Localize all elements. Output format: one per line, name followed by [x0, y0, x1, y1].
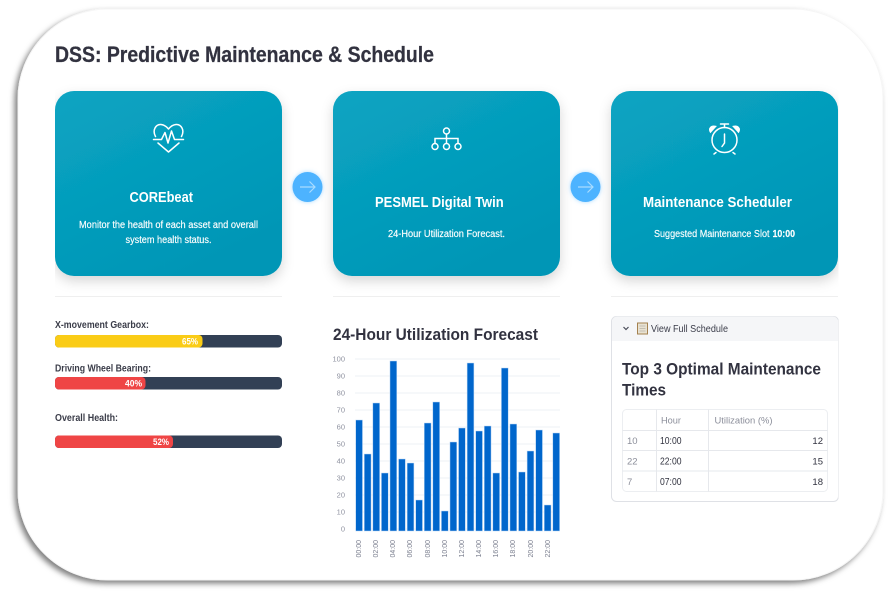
table: optimal maintenance times: [622, 410, 828, 492]
x axis labels: 08:00: [425, 540, 432, 558]
bars: [356, 361, 560, 531]
table: optimal maintenance times: 10: [627, 436, 638, 447]
heading: top 3 times: Times: [622, 380, 666, 400]
card description: 10:00: [772, 229, 795, 240]
icon: chevron: [624, 327, 628, 330]
x axis labels: 10:00: [442, 540, 449, 558]
bar: Driving Wheel Bearing: [55, 364, 282, 390]
arrow: COREbeat to Digital Twin: [292, 172, 322, 202]
card description: Monitor the health of each asset and overall: [79, 220, 258, 231]
table: optimal maintenance times: 07:00: [660, 476, 682, 488]
y axis labels: 80: [337, 388, 345, 398]
y axis labels: 50: [337, 440, 345, 448]
card description: [79, 220, 258, 246]
x axis labels: 14:00: [476, 540, 483, 558]
table: optimal maintenance times: 12: [812, 436, 823, 447]
table: optimal maintenance times: Hour: [661, 416, 681, 426]
icon: alarm clock: [710, 124, 739, 154]
bar chart: 24-hour utilization: [332, 354, 560, 558]
icon: network hierarchy: [432, 128, 461, 150]
panel: health status bars: [55, 320, 282, 448]
table: optimal maintenance times: 22:00: [660, 456, 682, 468]
table: optimal maintenance times: 18: [812, 477, 823, 488]
y axis labels: 10: [337, 508, 345, 516]
y axis labels: 30: [337, 474, 345, 482]
y axis labels: 100: [332, 354, 345, 364]
table: optimal maintenance times: 7: [627, 477, 632, 488]
dashboard content: [55, 42, 838, 558]
panel: PESMEL Digital Twin card: [333, 91, 560, 276]
card heading: PESMEL Digital Twin: PESMEL Digital Twin: [375, 195, 504, 211]
panel: Maintenance Scheduler card: [611, 91, 838, 276]
card description: 24-Hour Utilization Forecast.: [388, 229, 505, 240]
x axis labels: [356, 540, 552, 558]
x axis labels: 06:00: [407, 540, 414, 558]
x axis labels: 16:00: [493, 540, 500, 558]
heading: top 3 times: [622, 360, 821, 400]
y axis labels: 90: [337, 372, 345, 380]
y axis labels: 20: [337, 490, 345, 500]
bar: X-movement Gearbox: [55, 320, 282, 348]
bar: Driving Wheel Bearing: Driving Wheel Bearing:: [55, 364, 151, 374]
icon: heart with pulse: [154, 124, 184, 152]
bar: Overall Health: 52%: [153, 437, 169, 447]
bar: Driving Wheel Bearing: 40%: [125, 378, 142, 388]
bar: X-movement Gearbox: X-movement Gearbox:: [55, 320, 149, 331]
card heading: COREbeat: COREbeat: [130, 190, 193, 206]
x axis labels: 04:00: [390, 540, 397, 558]
heading: top 3 times: Top 3 Optimal Maintenance: [622, 360, 821, 378]
x axis labels: 18:00: [510, 540, 517, 558]
x axis labels: 02:00: [373, 540, 380, 558]
card description: system health status.: [126, 235, 212, 246]
heading: chart title: 24-Hour Utilization Forecast: [333, 325, 538, 344]
x axis labels: 00:00: [356, 540, 363, 558]
y axis labels: [332, 354, 345, 534]
arrow: Digital Twin to Scheduler: [570, 172, 600, 202]
table: optimal maintenance times: 15: [812, 456, 823, 468]
table: optimal maintenance times: 22: [627, 456, 638, 468]
bar: Overall Health: Overall Health:: [55, 413, 118, 424]
x axis labels: 20:00: [528, 540, 535, 558]
y axis labels: 70: [337, 406, 345, 414]
y axis labels: 40: [337, 456, 345, 466]
y axis labels: 60: [337, 422, 345, 432]
expander label: View Full Schedule: [651, 324, 728, 335]
bar: Overall Health: [55, 413, 282, 448]
x axis labels: 22:00: [545, 540, 552, 558]
panel: schedule expander: [612, 316, 838, 502]
bar: X-movement Gearbox: 65%: [182, 336, 198, 346]
card heading: Maintenance Scheduler: Maintenance Scheduler: [643, 195, 792, 211]
x axis labels: 12:00: [459, 540, 466, 558]
card description: Suggested Maintenance Slot: [654, 229, 770, 240]
icon: clipboard: [638, 323, 648, 334]
panel: COREbeat card: [55, 91, 282, 276]
table: optimal maintenance times: 10:00: [660, 435, 682, 447]
table: optimal maintenance times: Utilization (%): [714, 416, 772, 426]
y axis labels: 0: [341, 524, 345, 534]
title: DSS: Predictive Maintenance & Schedule: [55, 42, 434, 67]
